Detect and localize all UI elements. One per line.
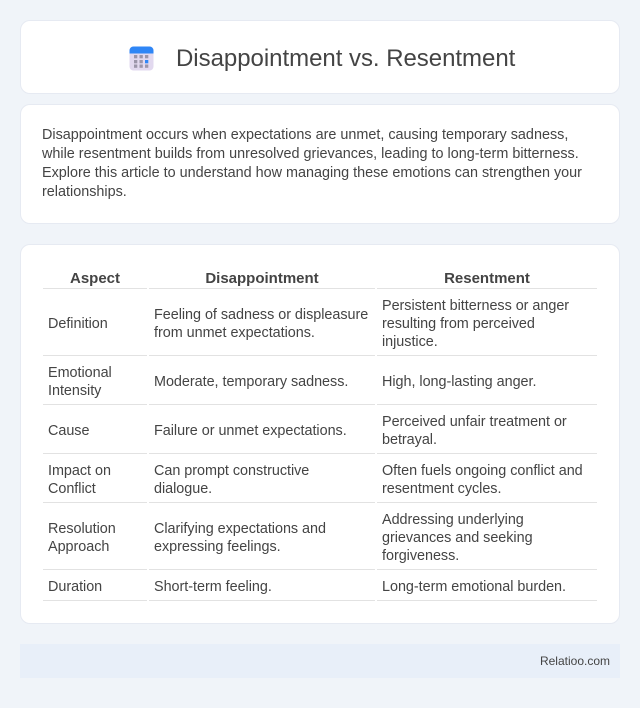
row: Resolution Approach bbox=[48, 521, 116, 555]
intro text: Explore this article to understand how managing these emotions can strengthen your bbox=[42, 165, 582, 181]
row: Emotional Intensity bbox=[48, 365, 112, 399]
panel: comparison table bbox=[20, 244, 620, 624]
comparison table: Long-term emotional burden. bbox=[382, 579, 566, 595]
comparison table: High, long-lasting anger. bbox=[382, 374, 536, 390]
comparison table: Clarifying expectations and bbox=[154, 521, 326, 537]
comparison table: from unmet expectations. bbox=[154, 325, 315, 341]
comparison table: Moderate, temporary sadness. bbox=[154, 374, 348, 390]
comparison table: grievances and seeking bbox=[382, 530, 533, 546]
comparison table: resentment cycles. bbox=[382, 481, 501, 497]
footer credit: Relatioo.com bbox=[540, 654, 610, 668]
panel: title card bbox=[20, 20, 620, 94]
footer bar bbox=[20, 644, 620, 678]
row: Cause: Cause bbox=[48, 423, 89, 439]
row: Emotional Intensity: Intensity bbox=[48, 383, 101, 399]
row: Impact on Conflict: Impact on bbox=[48, 463, 111, 479]
comparison table: Perceived unfair treatment or bbox=[382, 414, 567, 430]
comparison table: injustice. bbox=[382, 334, 438, 350]
intro text: while resentment builds from unresolved grievances, leading to long-term bitterness. bbox=[42, 146, 579, 162]
row: Resolution Approach: Approach bbox=[48, 539, 109, 555]
comparison table: expressing feelings. bbox=[154, 539, 281, 555]
comparison table bbox=[43, 270, 597, 601]
comparison table: forgiveness. bbox=[382, 548, 459, 564]
header: Disappointment: Disappointment bbox=[205, 270, 319, 287]
header: Resentment: Resentment bbox=[444, 270, 530, 287]
row: Resolution Approach: Resolution bbox=[48, 521, 116, 537]
title: Disappointment vs. Resentment bbox=[176, 45, 515, 72]
intro text bbox=[42, 127, 582, 200]
comparison table: betrayal. bbox=[382, 432, 437, 448]
row: Impact on Conflict: Conflict bbox=[48, 481, 96, 497]
comparison table: Addressing underlying bbox=[382, 512, 524, 528]
row: Duration: Duration bbox=[48, 579, 102, 595]
comparison table: Often fuels ongoing conflict and bbox=[382, 463, 583, 479]
intro text: Disappointment occurs when expectations are unmet, causing temporary sadness, bbox=[42, 127, 568, 143]
intro text: relationships. bbox=[42, 184, 127, 200]
comparison table: dialogue. bbox=[154, 481, 212, 497]
row: Definition: Definition bbox=[48, 316, 108, 332]
comparison table: Feeling of sadness or displeasure bbox=[154, 307, 368, 323]
comparison table: Persistent bitterness or anger bbox=[382, 298, 569, 314]
comparison table: Short-term feeling. bbox=[154, 579, 272, 595]
row: Impact on Conflict bbox=[48, 463, 111, 497]
comparison table: resulting from perceived bbox=[382, 316, 535, 332]
header: Aspect: Aspect bbox=[70, 270, 120, 287]
comparison table: Can prompt constructive bbox=[154, 463, 309, 479]
panel: introduction bbox=[20, 104, 620, 224]
comparison table: Failure or unmet expectations. bbox=[154, 423, 347, 439]
icon: calendar bbox=[130, 46, 154, 70]
row: Emotional Intensity: Emotional bbox=[48, 365, 112, 381]
